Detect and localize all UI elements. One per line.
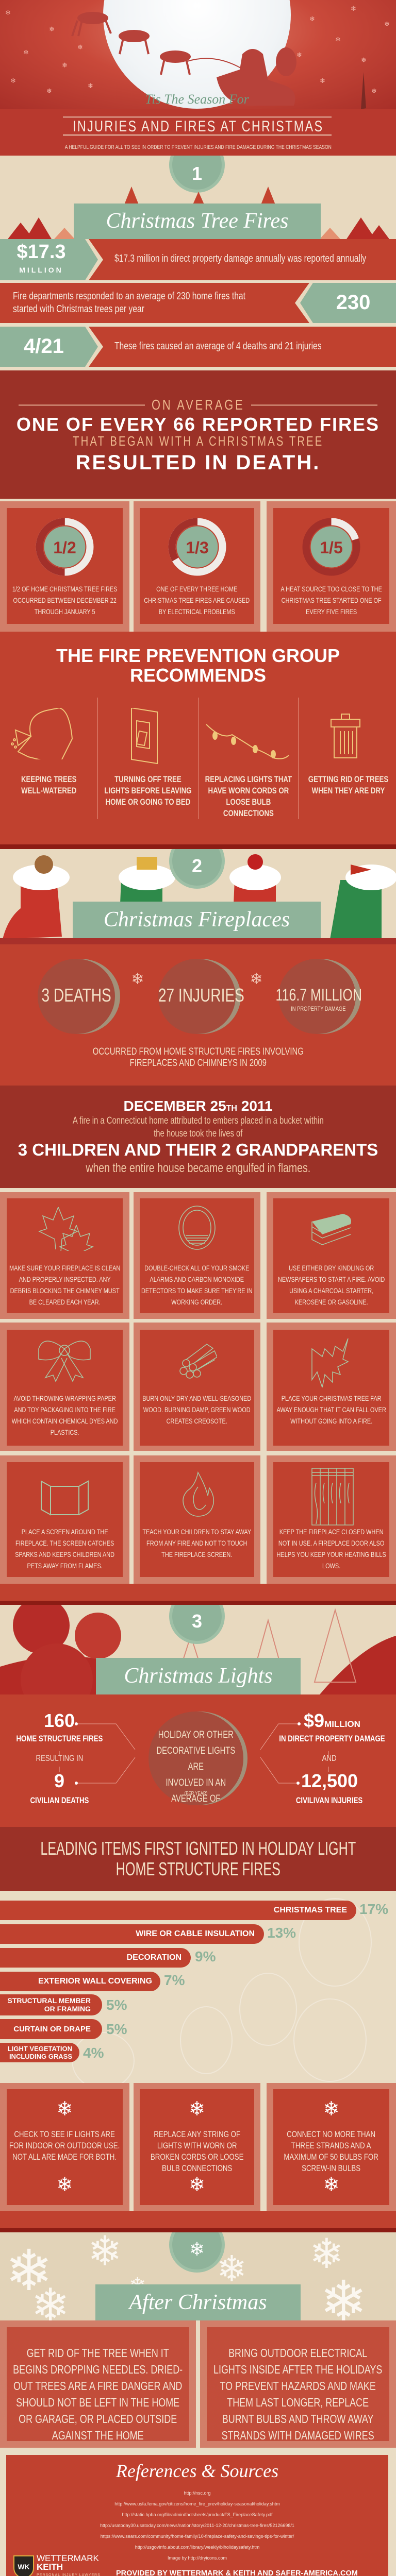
bar chart: items first ignited: CHRISTMAS TREE: [274, 1906, 347, 1914]
callout: december 25th 2011: DECEMBER 25TH 2011: [123, 1098, 273, 1114]
bar chart: items first ignited: [0, 1898, 388, 2083]
tip: tree away from fire: [267, 1323, 396, 1451]
right stat: 9 million, 12,500 injuries: [279, 1710, 385, 1805]
snowflakes pattern: ❄: [371, 88, 377, 95]
snowflakes pattern: [5, 5, 390, 95]
tip: wrapping paper: [0, 1323, 129, 1451]
labels: WELL-WATERED: [21, 786, 76, 795]
stockings decoration: [3, 854, 396, 938]
callout: one of every 66 fires: [0, 370, 396, 499]
callout: december 25th 2011: 3 CHILDREN AND THEIR 2 GRANDPARENTS: [18, 1140, 378, 1159]
labels: [21, 774, 76, 795]
icon: trash can: [331, 714, 360, 758]
snowflakes pattern: ❄: [384, 21, 390, 28]
logo: wettermark keith: KEITH: [37, 2562, 63, 2572]
bar chart: items first ignited: 13%: [267, 1925, 296, 1941]
callout: one of every 66 fires: RESULTED IN DEATH.: [76, 451, 320, 474]
card 1/2: 1/2: [53, 538, 76, 557]
tip: bring lights inside: BRING OUTDOOR ELECTRICAL LIGHTS INSIDE AFTER THE HOLIDAYS TO PREVENT HAZARDS AND MAKE THEM LAST LONGER, REPLACE BURNT BULBS AND THROW AWAY STRANDS WITH DAMAGED WIRES: [213, 2346, 383, 2442]
cards: lights tips: [0, 2083, 396, 2211]
heading: RECOMMENDS: [130, 665, 266, 686]
grid: fireplace safety tips: [0, 1192, 396, 1584]
left stat: 160 fires, 9 deaths: [16, 1710, 103, 1805]
tip: tree away from fire: PLACE YOUR CHRISTMAS TREE FAR AWAY ENOUGH THAT IT CAN FALL OVER WITHOUT GOING INTO A FIRE.: [276, 1394, 386, 1425]
stat row: 17.3 million: MILLION: [19, 266, 63, 274]
heading: [56, 645, 340, 686]
snowflakes pattern: ❄: [320, 77, 325, 85]
bar chart: items first ignited: CURTAIN OR DRAPE: [13, 2025, 91, 2033]
stat circle: damage: [276, 959, 362, 1034]
moon: [103, 0, 291, 109]
card 1/2: 1/2 OF HOME CHRISTMAS TREE FIRES OCCURRED BETWEEN DECEMBER 22 THROUGH JANUARY 5: [12, 585, 117, 616]
right stat: 9 million, 12,500 injuries: IN DIRECT PROPERTY DAMAGE: [279, 1734, 385, 1743]
labels: KEEPING TREES: [21, 774, 76, 784]
ornaments decoration: [0, 1605, 396, 1694]
caption: [93, 1046, 303, 1069]
references heading: References & Sources: [116, 2461, 278, 2481]
center circle: HOLIDAY OR OTHER: [158, 1730, 234, 1740]
panel: fire prevention recommendations: GETTING RID OF TREES WHEN THEY ARE DRY: [308, 774, 389, 795]
subtitle: A HELPFUL GUIDE FOR ALL TO SEE IN ORDER TO PREVENT INJURIES AND FIRE DAMAGE DURING THE CHRISTMAS SEASON: [64, 144, 332, 150]
card 1/3: 1/3: [186, 538, 209, 557]
center circle: AVERAGE OF: [171, 1793, 221, 1804]
tip: three strands: ❄: [323, 2173, 339, 2196]
stat circle: injuries: [158, 959, 244, 1034]
snowflake icon: ❄: [131, 970, 144, 988]
heading: leading items: HOME STRUCTURE FIRES: [116, 1858, 280, 1879]
tip: clean fireplace: MAKE SURE YOUR FIREPLACE IS CLEAN AND PROPERLY INSPECTED. ANY DEBRIS BLOCKING THE CHIMNEY MUST BE CLEARED EACH YEAR.: [9, 1264, 120, 1306]
center circle: [148, 1711, 248, 1805]
tip: three strands: CONNECT NO MORE THAN THREE STRANDS AND A MAXIMUM OF 50 BULBS FOR SCREW-IN BULBS: [284, 2129, 378, 2173]
snowflakes pattern: ❄: [361, 57, 367, 64]
snowflakes pattern: ❄: [49, 26, 55, 33]
stat circle: damage: 116.7 MILLION: [276, 986, 362, 1004]
main title: INJURIES AND FIRES AT CHRISTMAS: [73, 118, 323, 135]
tip: indoor/outdoor: [0, 2083, 129, 2211]
snowflakes decoration: ❄: [5, 2238, 53, 2303]
snowflakes pattern: ❄: [309, 15, 315, 23]
stat row: 17.3 million: $17.3: [16, 241, 66, 263]
source list: http://usatoday30.usatoday.com/news/nation/story/2011-12-20/christmas-tree-fires/52126698/1: [100, 2523, 294, 2528]
circle with snowflake: ❄: [189, 2239, 205, 2260]
tip: smoke alarms: DOUBLE-CHECK ALL OF YOUR SMOKE ALARMS AND CARBON MONOXIDE DETECTORS TO MAKE SURE THEY'RE IN WORKING ORDER.: [141, 1264, 253, 1306]
tip: teach children: [134, 1455, 260, 1584]
card 1/3: [134, 501, 260, 632]
right stat: 9 million, 12,500 injuries: AND: [322, 1753, 337, 1763]
stat row: 4/21: [0, 327, 396, 367]
tip: replace strings: REPLACE ANY STRING OF LIGHTS WITH WORN OR BROKEN CORDS OR LOOSE BULB CONNECTIONS: [151, 2129, 243, 2173]
bar chart: items first ignited: 9%: [195, 1948, 216, 1964]
card 1/2: [0, 501, 129, 632]
card 1/3: ONE OF EVERY THREE HOME CHRISTMAS TREE FIRES ARE CAUSED BY ELECTRICAL PROBLEMS: [144, 585, 250, 616]
stat row: 17.3 million: [0, 239, 396, 280]
source list: Image by http://dryicons.com: [168, 2555, 227, 2561]
card 1/5: A HEAT SOURCE TOO CLOSE TO THE CHRISTMAS TREE STARTED ONE OF EVERY FIVE FIRES: [280, 585, 382, 616]
snowflakes pattern: ❄: [77, 44, 83, 52]
icon: string lights: [206, 724, 289, 759]
heading: leading items: [0, 1827, 396, 1891]
bar chart: items first ignited: WIRE OR CABLE INSULATION: [136, 1929, 255, 1938]
stat circle: damage: IN PROPERTY DAMAGE: [291, 1005, 346, 1012]
heading: THE FIRE PREVENTION GROUP: [56, 645, 340, 666]
callout: december 25th 2011: A fire in a Connecticut home attributed to embers placed in a bucket within: [73, 1115, 323, 1126]
section title box: [96, 1658, 301, 1694]
snowflakes decoration: ❄: [129, 2274, 146, 2297]
circle with snowflake: [169, 2217, 225, 2273]
stat cards: fractions: [0, 501, 396, 632]
snowflakes decoration: ❄: [217, 2248, 247, 2290]
stat row: 4/21: 4/21: [24, 335, 64, 358]
snowflakes pattern: ❄: [46, 88, 52, 95]
section title box: Christmas Lights: [124, 1664, 273, 1688]
number circle 3: 3: [192, 1611, 202, 1632]
panel: fire prevention recommendations: [0, 632, 396, 844]
logo: wettermark keith: [13, 2553, 101, 2576]
center circle: DECORATIVE LIGHTS ARE: [157, 1745, 235, 1772]
logo: wettermark keith: WK: [18, 2563, 30, 2571]
tip: replace strings: ❄: [189, 2097, 205, 2120]
section 2 banner: stockings: [0, 849, 396, 938]
stat row: 230 fires: started with Christmas trees per year: [13, 303, 144, 315]
tip: get rid of tree: [0, 2320, 196, 2448]
snowflake icon: ❄: [250, 970, 263, 988]
tip: three strands: [267, 2083, 396, 2211]
left stat: 160 fires, 9 deaths: RESULTING IN: [36, 1753, 83, 1763]
bar chart: items first ignited: 4%: [83, 2045, 104, 2061]
snowflakes pattern: ❄: [335, 36, 341, 44]
source list: https://www.sears.com/community/home-family/10-fireplace-safety-and-savings-tips-for-winter/: [101, 2534, 294, 2539]
tip: bring lights inside: [200, 2320, 396, 2448]
heading: leading items: LEADING ITEMS FIRST IGNITED IN HOLIDAY LIGHT: [40, 1838, 356, 1859]
tip: replace strings: ❄: [189, 2173, 205, 2196]
left stat: 160 fires, 9 deaths: 160: [44, 1710, 75, 1731]
tip: indoor/outdoor: ❄: [57, 2097, 73, 2120]
tip: fireplace closed: KEEP THE FIREPLACE CLOSED WHEN NOT IN USE. A FIREPLACE DOOR ALSO HELPS YOU KEEP YOUR HEATING BILLS LOWS.: [276, 1528, 386, 1570]
panel: references and sources: [6, 2455, 388, 2576]
bar chart: items first ignited: 17%: [359, 1901, 388, 1917]
stat circle: deaths: [38, 959, 120, 1034]
left stat: 160 fires, 9 deaths: HOME STRUCTURE FIRES: [16, 1734, 103, 1743]
right stat: 9 million, 12,500 injuries: 12,500: [301, 1770, 358, 1791]
panel: fireplace stats: [0, 944, 396, 1086]
section title box: [73, 902, 321, 938]
tip: indoor/outdoor: CHECK TO SEE IF LIGHTS ARE FOR INDOOR OR OUTDOOR USE. NOT ALL ARE MADE FOR BOTH.: [9, 2129, 120, 2162]
snowflakes pattern: ❄: [296, 52, 302, 59]
left stat: 160 fires, 9 deaths: CIVILIAN DEATHS: [30, 1795, 89, 1805]
right stat: 9 million, 12,500 injuries: $9MILLION: [304, 1710, 360, 1731]
tip: three strands: ❄: [323, 2097, 339, 2120]
bar chart: items first ignited: 5%: [106, 1997, 127, 2013]
source list: http://usgovinfo.about.com/library/weekly/blholidaysafety.htm: [135, 2545, 259, 2550]
section title box: [95, 2284, 301, 2320]
ornament background: [72, 1898, 372, 2083]
callout: december 25th 2011: the house took the lives of: [154, 1128, 242, 1139]
tip: get rid of tree: GET RID OF THE TREE WHEN IT BEGINS DROPPING NEEDLES. DRIED-OUT TREES ARE A FIRE DANGER AND SHOULD NOT BE LEFT IN THE HOME OR GARAGE, OR PLACED OUTSIDE AGAINST THE HOME: [13, 2346, 183, 2442]
snowflakes pattern: ❄: [23, 49, 29, 57]
callout: december 25th 2011: when the entire house became engulfed in flames.: [86, 1161, 310, 1175]
snowflakes pattern: ❄: [351, 5, 356, 13]
stat row: 230 fires: Fire departments responded to an average of 230 home fires that: [13, 291, 245, 302]
number circle 2: 2: [192, 855, 202, 876]
source list: http://www.usfa.fema.gov/citizens/home_fire_prev/holiday-seasonal/holiday.shtm: [114, 2501, 280, 2506]
tip: screen: [0, 1455, 129, 1584]
icon: watering can: [11, 708, 73, 759]
tip: dry wood: [134, 1323, 260, 1451]
bar chart: items first ignited: 7%: [164, 1972, 185, 1988]
tip: teach children: TEACH YOUR CHILDREN TO STAY AWAY FROM ANY FIRE AND NOT TO TOUCH THE FIREPLACE SCREEN.: [143, 1528, 251, 1558]
panel: fire prevention recommendations: TURNING OFF TREE LIGHTS BEFORE LEAVING HOME OR GOING TO BED: [104, 774, 191, 807]
section 1 banner: trees: [0, 156, 396, 239]
number circle 1: 1: [192, 163, 202, 184]
tip: wrapping paper: AVOID THROWING WRAPPING PAPER AND TOY PACKAGING INTO THE FIRE WHICH CONTAIN CHEMICAL DYES AND PLASTICS.: [12, 1394, 118, 1436]
cards: after christmas tips: [0, 2320, 396, 2448]
stat circle: deaths: 3 DEATHS: [41, 985, 111, 1006]
bar chart: items first ignited: 5%: [106, 2021, 127, 2037]
center circle: (PER YEAR): [185, 1791, 207, 1797]
bar chart: items first ignited: EXTERIOR WALL COVERING: [38, 1977, 152, 1986]
connector lines: [59, 1722, 329, 1785]
section 3 banner: ornaments: [0, 1605, 396, 1694]
callout: one of every 66 fires: ON AVERAGE: [152, 397, 244, 413]
tip: replace strings: [134, 2083, 260, 2211]
tip: indoor/outdoor: ❄: [57, 2173, 73, 2196]
tip: kindling: USE EITHER DRY KINDLING OR NEWSPAPERS TO START A FIRE. AVOID USING A CHARCOAL STARTER, KEROSENE OR GASOLINE.: [278, 1264, 385, 1306]
section title box: Christmas Tree Fires: [106, 209, 288, 233]
stat row: 4/21: These fires caused an average of 4 deaths and 21 injuries: [114, 341, 322, 352]
section 4 banner: snowflakes: [0, 2232, 396, 2320]
snowflakes pattern: ❄: [10, 77, 16, 85]
panel: christmas lights stats: [0, 1694, 396, 1827]
panel: fire prevention recommendations: REPLACING LIGHTS THAT HAVE WORN CORDS OR LOOSE BULB CONNECTIONS: [205, 774, 292, 818]
number circle 2: [169, 833, 225, 889]
snowflakes decoration: [5, 2232, 367, 2320]
callout: one of every 66 fires: ONE OF EVERY 66 REPORTED FIRES: [16, 414, 380, 435]
title band: [0, 109, 396, 156]
callout: december 25th 2011: [0, 1086, 396, 1188]
number circle 1: [169, 137, 225, 193]
caption: OCCURRED FROM HOME STRUCTURE FIRES INVOLVING: [93, 1046, 303, 1057]
section title box: Christmas Fireplaces: [104, 908, 290, 931]
left stat: 160 fires, 9 deaths: 9: [54, 1770, 64, 1791]
stat row: 17.3 million: $17.3 million in direct property damage annually was reported annually: [114, 253, 366, 264]
caption: FIREPLACES AND CHIMNEYS IN 2009: [129, 1058, 267, 1069]
snowflakes pattern: ❄: [5, 9, 11, 17]
tip: kindling: [267, 1192, 396, 1319]
section title box: [74, 204, 321, 239]
card 1/5: 1/5: [320, 538, 343, 557]
snowflakes pattern: ❄: [62, 62, 68, 70]
bar chart: items first ignited: DECORATION: [127, 1953, 182, 1962]
tip: dry wood: BURN ONLY DRY AND WELL-SEASONED WOOD. BURNING DAMP, GREEN WOOD CREATES CREOSOTE.: [143, 1394, 251, 1425]
stat circle: injuries: 27 INJURIES: [158, 985, 244, 1006]
callout: one of every 66 fires: THAT BEGAN WITH A CHRISTMAS TREE: [73, 433, 323, 449]
icon: light switch: [131, 708, 158, 765]
stat row: 230 fires: [0, 283, 396, 323]
stat row: 230 fires: 230: [336, 291, 370, 314]
tip: screen: PLACE A SCREEN AROUND THE FIREPLACE. THE SCREEN CATCHES SPARKS AND KEEPS CHILDREN AND PETS AWAY FROM FLAMES.: [15, 1528, 114, 1570]
trees decoration: [8, 187, 389, 239]
bar chart: items first ignited: INCLUDING GRASS: [9, 2053, 72, 2060]
logo: wettermark keith: WETTERMARK: [37, 2553, 99, 2563]
tip: smoke alarms: [134, 1192, 260, 1319]
tip: clean fireplace: [0, 1192, 129, 1319]
number circle 3: [169, 1588, 225, 1644]
sleigh and reindeer silhouette: [71, 12, 366, 109]
bar chart: items first ignited: LIGHT VEGETATION: [8, 2045, 72, 2053]
bar chart: items first ignited: OR FRAMING: [44, 2005, 91, 2013]
bar chart: items first ignited: STRUCTURAL MEMBER: [7, 1996, 91, 2005]
right stat: 9 million, 12,500 injuries: CIVILIVAN INJURIES: [296, 1795, 363, 1805]
section title box: After Christmas: [129, 2291, 267, 2314]
card 1/5: [267, 501, 396, 632]
source list: http://nsc.org: [184, 2490, 211, 2496]
header: night sky with moon and sleigh: [0, 0, 396, 109]
tis the season text: Tis The Season For: [145, 92, 249, 107]
center circle: INVOLVED IN AN: [166, 1777, 226, 1788]
tip: fireplace closed: [267, 1455, 396, 1584]
source list: http://static.hpba.org/fileadmin/factsheets/product/FS_FireplaceSafety.pdf: [122, 2512, 272, 2517]
source list: [100, 2490, 294, 2561]
snowflakes pattern: ❄: [88, 82, 93, 90]
